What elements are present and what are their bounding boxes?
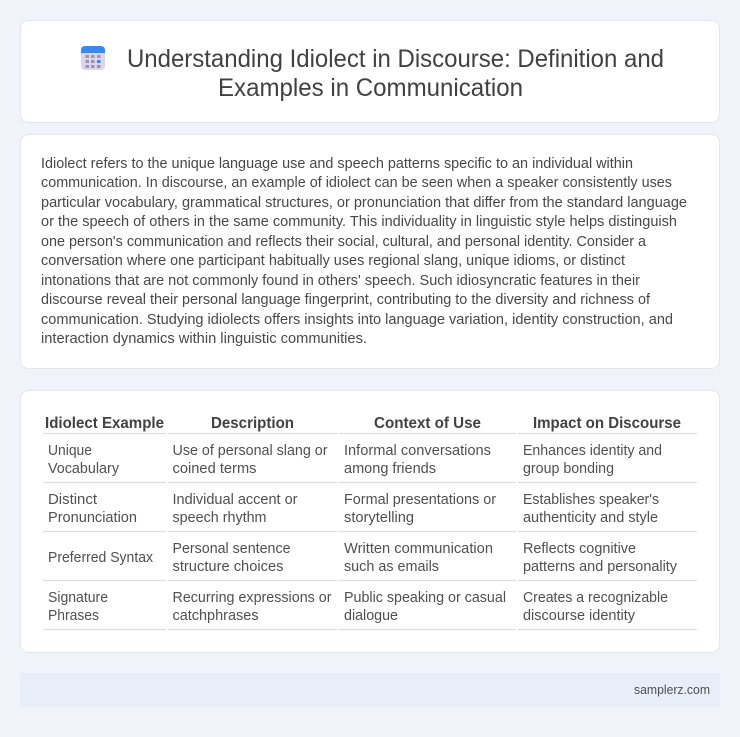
table row: signature phrases: discourse identity <box>523 608 636 624</box>
text block: definition of idiolect: discourse reveal their personal language fingerprint, contributing to the diversity and richness of <box>41 292 651 308</box>
table row: distinct pronunciation: Establishes speaker's <box>523 492 659 508</box>
table row: preferred syntax: structure choices <box>172 559 284 575</box>
table row: signature phrases: Public speaking or casual <box>344 590 506 606</box>
table row: unique vocabulary: Unique <box>48 443 92 459</box>
table row: preferred syntax: Personal sentence <box>172 541 290 557</box>
table header <box>45 415 681 432</box>
table row: signature phrases: Creates a recognizable <box>523 590 668 606</box>
table row: preferred syntax: such as emails <box>344 559 439 575</box>
table row: unique vocabulary: Vocabulary <box>48 461 120 477</box>
icon: calendar <box>81 46 105 70</box>
panel: title header <box>20 20 720 122</box>
table row: distinct pronunciation: Formal presentations or <box>344 492 496 508</box>
table row: preferred syntax: Written communication <box>344 541 493 557</box>
table row: preferred syntax: Reflects cognitive <box>523 541 636 557</box>
text block: definition of idiolect: Idiolect refers to the unique language use and speech patterns specific to an individual within <box>41 156 633 172</box>
table row: signature phrases: dialogue <box>344 608 398 624</box>
text block: definition of idiolect: one person's communication and reflects their social, cultural, and personal identity. Consider a <box>41 234 647 250</box>
table row: distinct pronunciation: Distinct <box>48 492 97 508</box>
table row: unique vocabulary: Use of personal slang or <box>172 443 328 459</box>
table row: unique vocabulary: Informal conversations <box>344 443 491 459</box>
table row: signature phrases: Recurring expressions or <box>172 590 332 606</box>
footer <box>20 673 720 707</box>
table row: preferred syntax: patterns and personality <box>523 559 678 575</box>
panel: introduction paragraph <box>20 134 720 368</box>
table row: unique vocabulary: group bonding <box>523 461 614 477</box>
table row: signature phrases: Signature <box>48 590 108 606</box>
table row: distinct pronunciation: authenticity and style <box>523 510 658 526</box>
table row: unique vocabulary: Enhances identity and <box>523 443 662 459</box>
text block: definition of idiolect: conversation where one participant habitually uses regional slang, unique idioms, or distinct <box>41 253 625 269</box>
text block: definition of idiolect: communication. In discourse, an example of idiolect can be seen when a speaker consistently uses <box>41 175 672 191</box>
table row: distinct pronunciation: speech rhythm <box>172 510 266 526</box>
table header: Impact on Discourse <box>533 415 681 432</box>
text block: definition of idiolect: interaction dynamics within linguistic communities. <box>41 331 367 347</box>
title <box>127 45 664 102</box>
text block: definition of idiolect: or the speech of others in the same community. This individuality in linguistic style helps distinguish <box>41 214 677 230</box>
text block: definition of idiolect: particular vocabulary, grammatical structures, or pronunciation that differ from the standard language <box>41 195 687 211</box>
table row: signature phrases <box>48 590 668 624</box>
table row: distinct pronunciation: Individual accent or <box>172 492 298 508</box>
table header: Context of Use <box>374 415 481 432</box>
title: Examples in Communication <box>218 74 523 102</box>
table row: unique vocabulary <box>48 443 662 477</box>
title: Understanding Idiolect in Discourse: Definition and <box>127 45 664 73</box>
table header: Description <box>211 415 294 432</box>
table row: signature phrases: Phrases <box>48 608 99 624</box>
table row: signature phrases: catchphrases <box>172 608 258 624</box>
panel: idiolect table <box>20 390 720 652</box>
table row: preferred syntax <box>48 541 678 575</box>
table row: distinct pronunciation <box>48 492 659 526</box>
table row: distinct pronunciation: Pronunciation <box>48 510 137 526</box>
table row: unique vocabulary: among friends <box>344 461 436 477</box>
text block: definition of idiolect <box>41 156 687 347</box>
footer: samplerz.com <box>634 683 710 697</box>
table row: preferred syntax: Preferred Syntax <box>48 550 154 566</box>
table row: unique vocabulary: coined terms <box>172 461 256 477</box>
table row: distinct pronunciation: storytelling <box>344 510 414 526</box>
text block: definition of idiolect: intonations that are not commonly found in others' speech. Such idiosyncratic features in their <box>41 273 640 289</box>
table header: Idiolect Example <box>45 415 164 432</box>
text block: definition of idiolect: communication. Studying idiolects offers insights into language variation, identity construction, and <box>41 312 673 328</box>
